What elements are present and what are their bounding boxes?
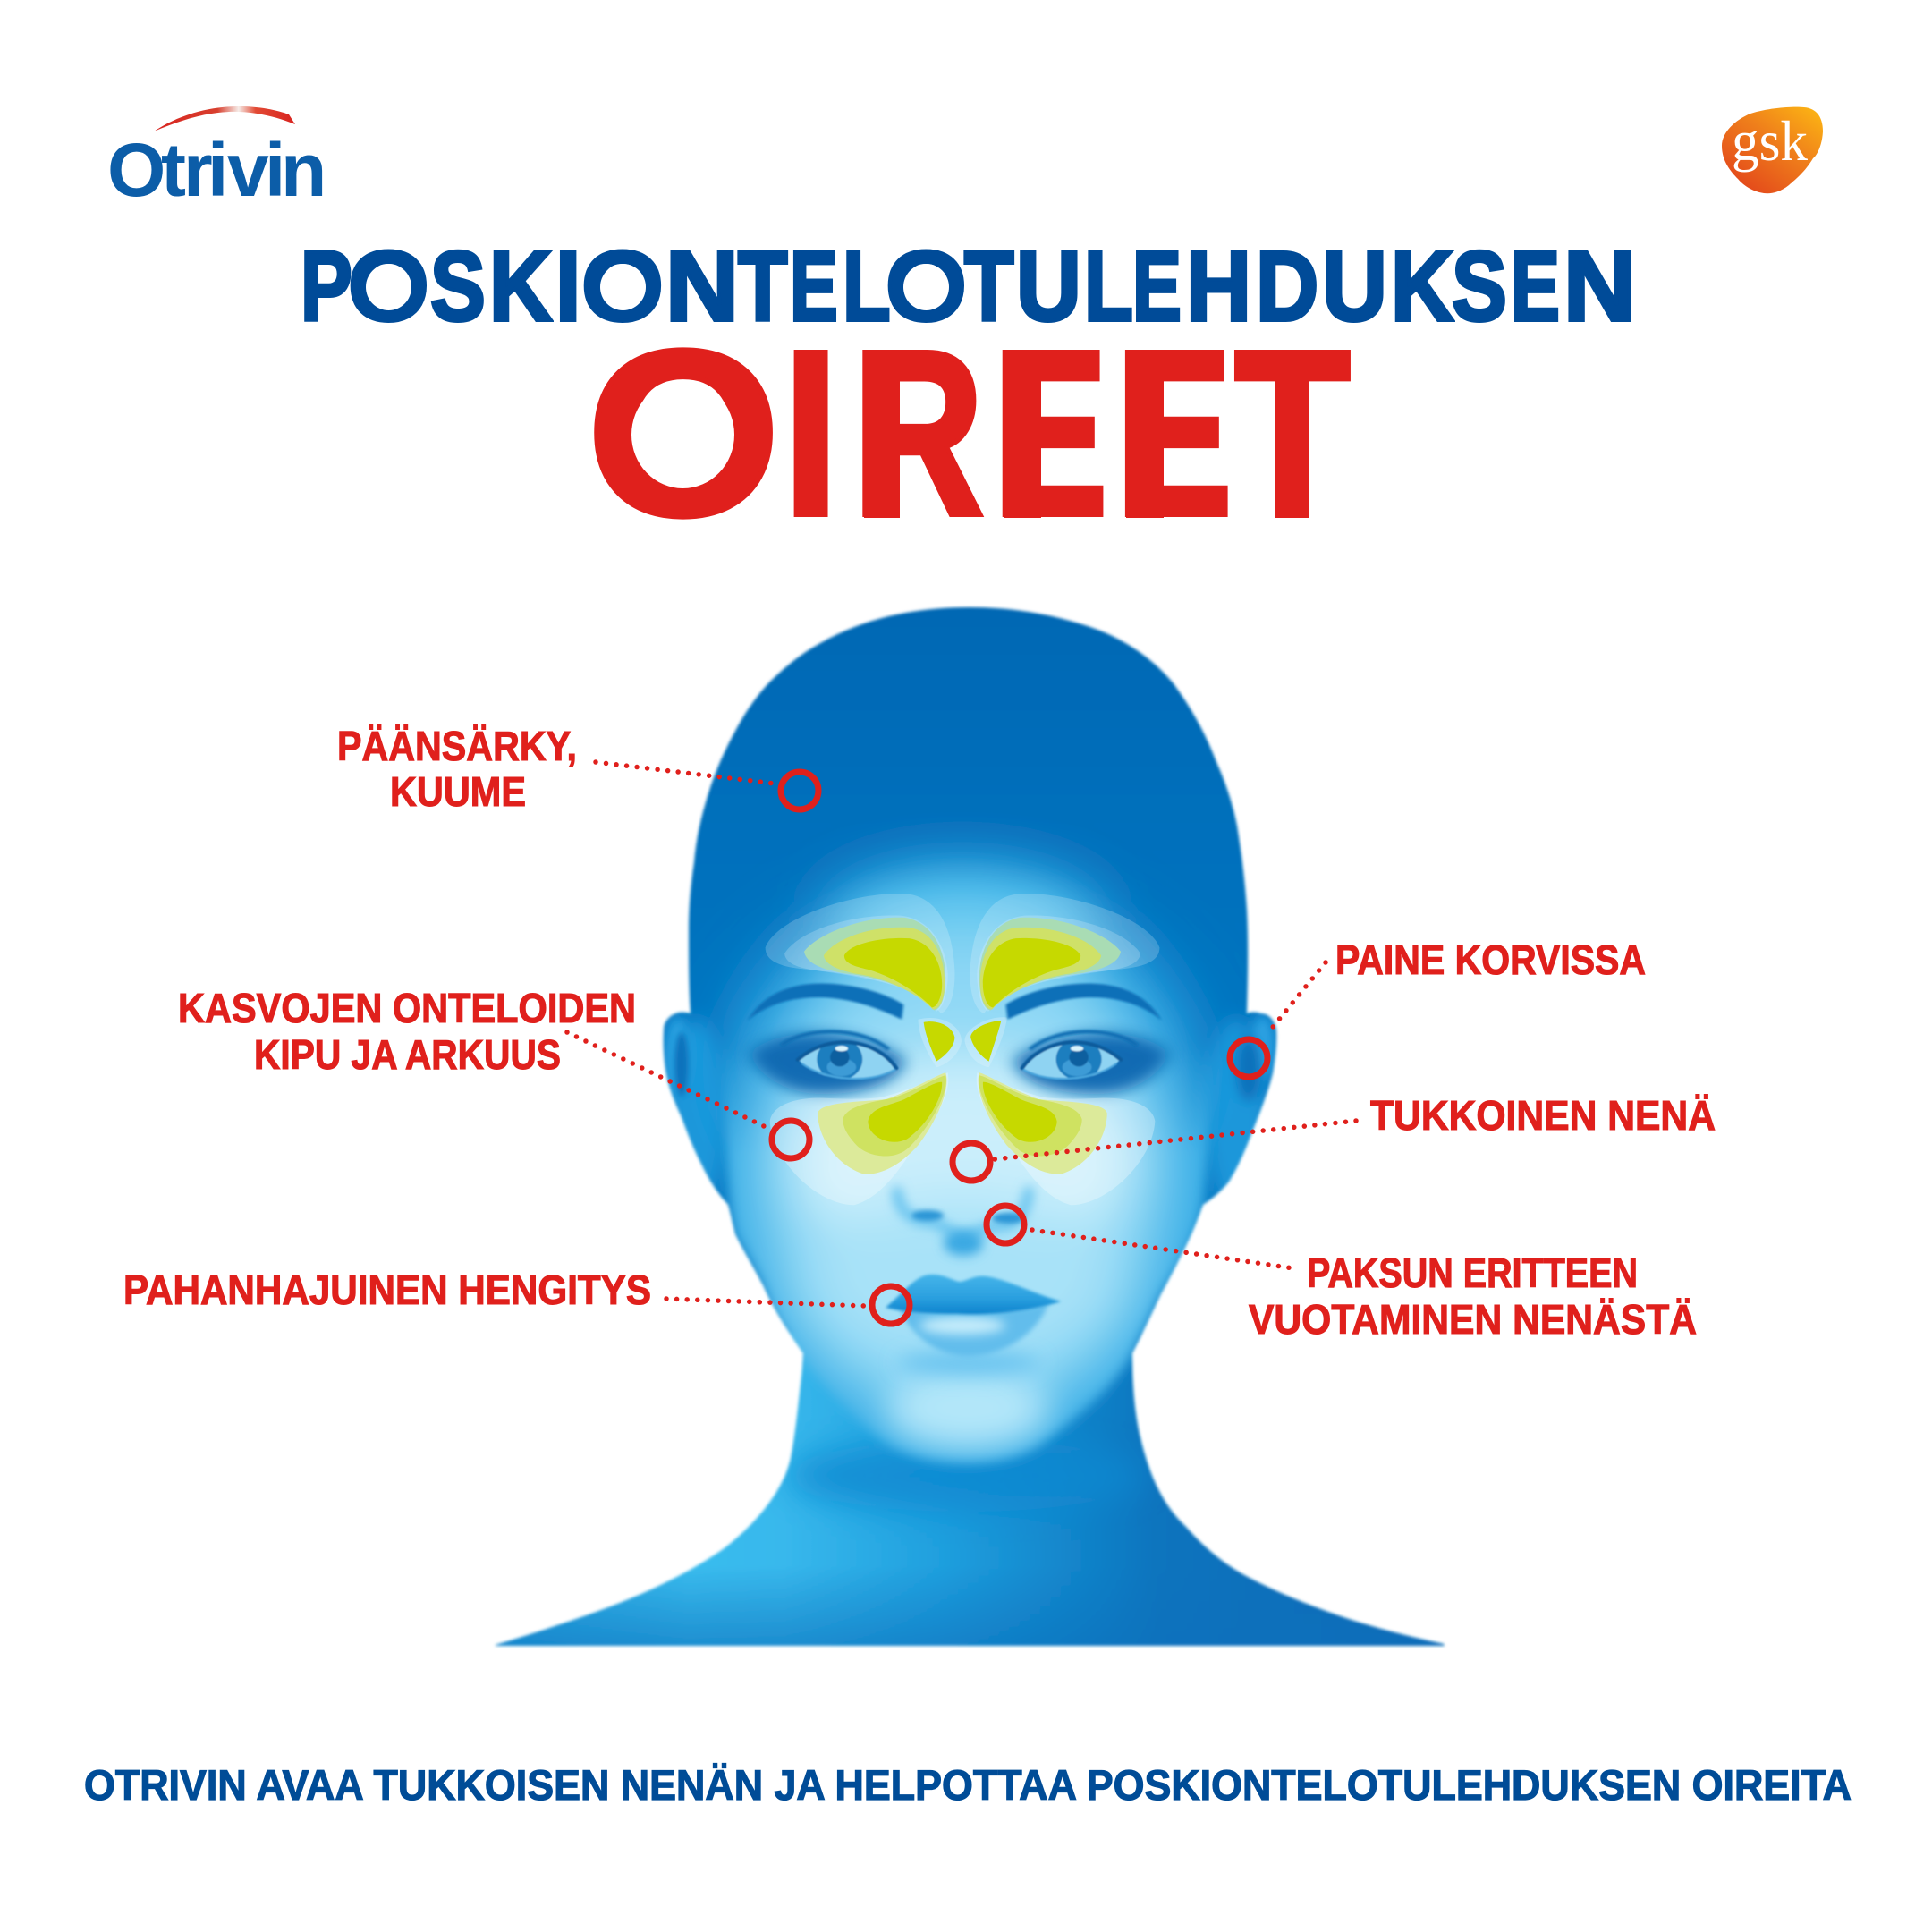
- title line one: E: [790, 232, 837, 342]
- title line one: E: [1132, 232, 1181, 342]
- label: KUUME: [390, 768, 526, 815]
- leader line: [666, 1299, 865, 1306]
- face tone: [698, 912, 1243, 1476]
- title line one: U: [1016, 232, 1081, 342]
- ethmoid sinus right: [970, 1021, 1001, 1062]
- symptom: bad breath: [123, 1267, 910, 1324]
- lips: [886, 1275, 1061, 1376]
- title line one: S: [430, 232, 486, 342]
- lower lip highlight: [919, 1317, 1005, 1335]
- logo: GSK: [1722, 107, 1823, 193]
- lower lip: [900, 1304, 1048, 1356]
- title line one: H: [1186, 232, 1251, 342]
- logo wordmark: Otrivin: [107, 128, 326, 212]
- label: [178, 985, 636, 1078]
- label: PAINE KORVISSA: [1335, 936, 1646, 983]
- right brow: [1005, 984, 1162, 1021]
- title line one: T: [738, 232, 787, 342]
- upper lip: [886, 1275, 1061, 1314]
- leader line: [1269, 962, 1326, 1031]
- left brow: [748, 984, 903, 1021]
- symptom: thick nasal discharge: [987, 1206, 1697, 1343]
- illustration: blue face: [483, 599, 1458, 1655]
- title line one: O: [348, 232, 429, 342]
- ethmoid sinus left: [924, 1021, 954, 1062]
- symptom: blocked nose: [953, 1092, 1716, 1181]
- title line one: I: [555, 232, 580, 342]
- lip shadow: [897, 1351, 1040, 1376]
- symptom: headache and fever: [337, 723, 818, 815]
- leader line: [995, 1121, 1356, 1159]
- maxillary sinus right: [977, 1072, 1155, 1205]
- leader line: [567, 1032, 766, 1127]
- right nostril: [992, 1213, 1024, 1224]
- title line one: L: [1084, 232, 1133, 342]
- label: VUOTAMINEN NENÄSTÄ: [1249, 1296, 1697, 1343]
- marker: [772, 1121, 809, 1158]
- title line two: E: [993, 301, 1108, 564]
- title line one: L: [843, 232, 891, 342]
- title line one: O: [886, 232, 966, 342]
- nose: [897, 1191, 1029, 1256]
- title line one: D: [1256, 232, 1318, 342]
- title line one: E: [1510, 232, 1559, 342]
- logo wordmark: gsk: [1732, 109, 1808, 173]
- logo shape: [1722, 107, 1823, 193]
- label: KIPU JA ARKUUS: [254, 1031, 561, 1078]
- nose outline shadow: [897, 1191, 1029, 1236]
- symptom: facial sinus pain: [178, 985, 809, 1158]
- upper face glow: [734, 894, 1191, 1234]
- left ear: [665, 1016, 726, 1208]
- symptom: ear pressure: [1230, 936, 1646, 1077]
- left nostril: [911, 1210, 944, 1221]
- maxillary sinus left: [770, 1072, 948, 1205]
- marker: [953, 1143, 990, 1181]
- logo: Otrivin: [107, 106, 326, 212]
- title line two: E: [1115, 301, 1233, 564]
- title line one: P: [301, 232, 352, 342]
- label: TUKKOINEN NENÄ: [1370, 1092, 1716, 1139]
- marker: [1230, 1039, 1267, 1077]
- title line two: R: [852, 301, 985, 564]
- sinuses and eyes: [748, 894, 1169, 1205]
- marker: [781, 772, 818, 809]
- title line one: S: [1452, 232, 1507, 342]
- footer statement: OTRIVIN AVAA TUKKOISEN NENÄN JA HELPOTTAA POSKIONTELOTULEHDUKSEN OIREITA: [84, 1761, 1852, 1809]
- title line one: K: [1391, 232, 1453, 342]
- title line one: K: [489, 232, 552, 342]
- title line two: [587, 301, 1351, 564]
- label: [337, 723, 577, 815]
- title line one: T: [964, 232, 1013, 342]
- label: PAKSUN ERITTEEN: [1307, 1250, 1638, 1296]
- label: [1249, 1250, 1697, 1343]
- label: KASVOJEN ONTELOIDEN: [178, 985, 636, 1031]
- ethmoid halo: [919, 1017, 1007, 1067]
- frontal sinus left: [766, 894, 954, 1013]
- right ear: [1206, 1014, 1275, 1208]
- logo swoosh: [154, 106, 295, 131]
- under-nose shadow: [944, 1231, 983, 1256]
- title line one: O: [581, 232, 664, 342]
- title line one: [301, 232, 1636, 520]
- title line two: I: [783, 301, 839, 564]
- title line one: N: [665, 232, 739, 342]
- frontal sinus right: [970, 894, 1159, 1013]
- left eye: [750, 1031, 904, 1094]
- title line two: O: [587, 301, 780, 564]
- leader line: [596, 762, 775, 784]
- title line two: T: [1234, 301, 1351, 564]
- marker: [872, 1286, 910, 1324]
- marker: [987, 1206, 1024, 1243]
- label: PAHANHAJUINEN HENGITYS: [123, 1267, 651, 1313]
- title line one: N: [1563, 232, 1636, 342]
- head silhouette: [483, 599, 1458, 1655]
- right eye: [1014, 1031, 1169, 1094]
- leader line: [1032, 1230, 1293, 1268]
- label: PÄÄNSÄRKY,: [337, 723, 577, 769]
- title line one: U: [1322, 232, 1387, 342]
